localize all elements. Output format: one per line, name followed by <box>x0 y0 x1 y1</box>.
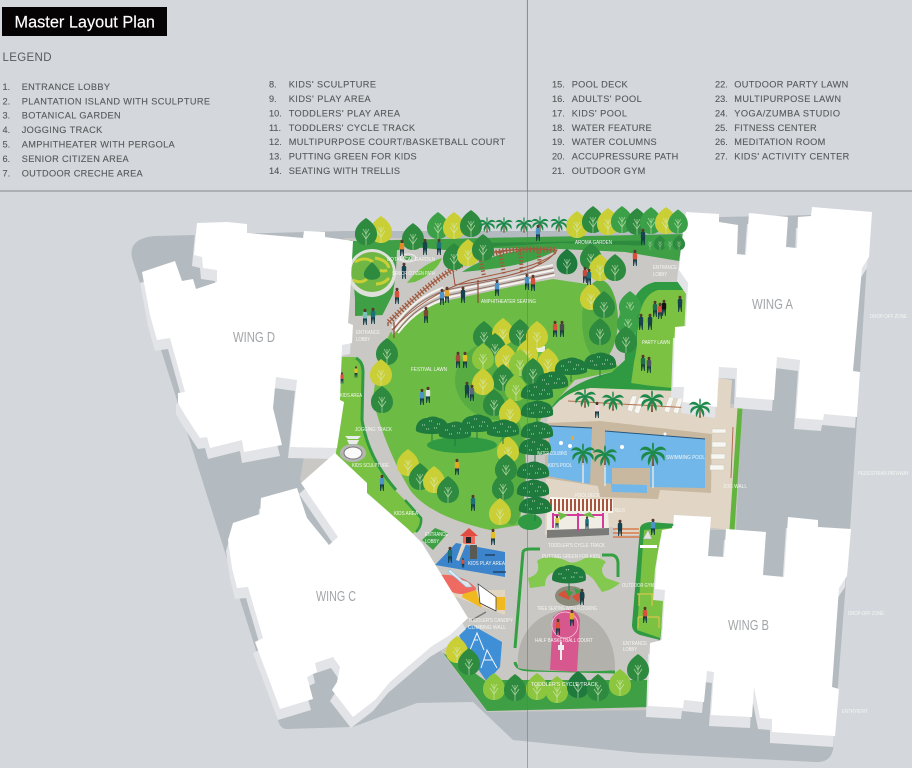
panel: map labels: FESTIVAL LAWN <box>411 367 447 373</box>
wing labels <box>233 297 793 634</box>
panel: map labels: KIDS AREA <box>394 511 418 517</box>
wing B footprint <box>648 515 851 736</box>
legend column 2: 14. <box>269 166 282 176</box>
panel: map labels: ENTRANCE <box>425 532 448 538</box>
panel: map labels: ENTRANCE <box>623 641 647 647</box>
legend column 1 <box>2 82 210 178</box>
legend column 2: MULTIPURPOSE COURT/BASKETBALL COURT <box>289 137 506 147</box>
legend column 3: ADULTS' POOL <box>572 94 642 104</box>
panel: toddlers swing area <box>458 612 502 682</box>
legend column 3: 15. <box>552 80 565 90</box>
legend column 3: 16. <box>552 94 565 104</box>
kids sculpture fountain <box>340 436 366 462</box>
panel: map labels: AMPHITHEATER SEATING <box>481 299 536 305</box>
legend column 3: ACCUPRESSURE PATH <box>572 152 678 162</box>
legend column 4: 27. <box>715 152 728 162</box>
legend column 4: OUTDOOR PARTY LAWN <box>734 80 848 90</box>
legend column 2: TODDLERS' PLAY AREA <box>289 108 401 118</box>
legend column 4: FITNESS CENTER <box>734 123 817 133</box>
legend column 1: PLANTATION ISLAND WITH SCULPTURE <box>22 96 210 106</box>
legend column 1: 1. <box>2 82 10 92</box>
legend column 4: 24. <box>715 108 728 118</box>
panel: palm trees <box>479 217 710 488</box>
panel: half basketball court <box>518 610 615 672</box>
legend column 2 <box>269 80 506 176</box>
panel: map labels: JOGGING TRACK <box>355 427 392 433</box>
legend column 3: 21. <box>552 166 565 176</box>
panel: map labels: WATER COLUMNS <box>537 451 567 457</box>
panel: map labels: TODDLER'S CANOPY <box>468 618 513 624</box>
panel: top garden band <box>350 234 685 320</box>
legend column 1: 5. <box>2 140 10 150</box>
legend column 2: 11. <box>269 123 281 133</box>
panel: map labels: HALF BASKETBALL COURT <box>535 638 594 644</box>
legend column 2: 9. <box>269 94 277 104</box>
legend column 1: AMPHITHEATER WITH PERGOLA <box>22 140 176 150</box>
panel: party lawn <box>548 282 690 412</box>
wing labels: WING D <box>233 330 275 346</box>
wing C footprint <box>228 453 468 717</box>
legend column 4: 23. <box>715 94 728 104</box>
pool swimmers <box>559 432 666 449</box>
panel: amphitheater seating <box>391 252 557 335</box>
site ground plate <box>131 215 870 762</box>
panel: pergola leaf <box>388 249 557 338</box>
panel: map labels: ENTRANCE <box>653 265 677 271</box>
panel: map labels: BOTANICAL GARDEN <box>387 257 435 263</box>
legend column 1: 6. <box>2 154 10 164</box>
building sides <box>140 218 870 747</box>
pergola with seating <box>547 497 639 538</box>
legend column 2: TODDLERS' CYCLE TRACK <box>289 123 416 133</box>
legend column 2: 10. <box>269 108 282 118</box>
legend column 3: OUTDOOR GYM <box>572 166 645 176</box>
legend column 4: 22. <box>715 80 728 90</box>
panel: festival lawn <box>373 279 620 530</box>
legend column 4: MEDITATION ROOM <box>734 137 825 147</box>
panel: map labels: SENIOR CITIZEN PATH <box>392 271 435 277</box>
wing labels: WING C <box>316 589 356 605</box>
panel: tree seating <box>552 565 586 606</box>
panel: plantation island garden <box>348 249 396 297</box>
legend column 3: 18. <box>552 123 565 133</box>
dark shrub mounds under trees <box>427 280 637 530</box>
wing D footprint <box>142 222 353 452</box>
panel: map labels: ENTRY/EXIT <box>842 709 869 715</box>
legend column 4: MULTIPURPOSE LAWN <box>734 94 841 104</box>
panel: map labels: LOBBY <box>653 272 667 278</box>
water-feature white planter <box>476 346 545 404</box>
panel: map labels: PUTTING GREEN FOR KIDS <box>542 554 600 560</box>
legend column 2: KIDS' PLAY AREA <box>289 94 372 104</box>
wing labels: WING A <box>752 297 793 313</box>
panel: map labels: LOBBY <box>425 539 439 545</box>
legend column 3: POOL DECK <box>572 80 629 90</box>
panel: map labels: ENTRANCE <box>356 330 380 336</box>
panel: map labels: TODDLER'S CYCLE TRACK <box>548 543 605 549</box>
panel: map labels: KID'S POOL <box>548 463 572 469</box>
panel: people figures <box>340 225 682 635</box>
play house <box>456 528 478 561</box>
panel: map labels: TRELLIS <box>613 508 625 514</box>
legend column 4 <box>715 80 850 162</box>
legend column 1: BOTANICAL GARDEN <box>22 111 121 121</box>
panel: map labels <box>340 240 909 715</box>
title <box>2 7 167 36</box>
legend column 2: PUTTING GREEN FOR KIDS <box>289 152 417 162</box>
panel: map labels: KIDS AREA <box>340 393 362 399</box>
legend column 2: 12. <box>269 137 282 147</box>
trellis rail <box>568 401 733 478</box>
panel: map labels: LOBBY <box>356 337 370 343</box>
title: Master Layout Plan <box>14 14 155 32</box>
panel: map labels: AROMA GARDEN <box>575 240 612 246</box>
panel: map labels: PARTY LAWN <box>642 340 670 346</box>
legend column 3 <box>552 80 678 176</box>
legend column 2: SEATING WITH TRELLIS <box>289 166 400 176</box>
legend column 4: 26. <box>715 137 728 147</box>
legend column 3: 17. <box>552 108 565 118</box>
panel: map labels: CLIMBING WALL <box>468 625 506 631</box>
legend column 1: OUTDOOR CRECHE AREA <box>22 168 144 178</box>
panel: map labels: SWIMMING POOL <box>666 455 705 461</box>
panel: map labels: TREE SEATING WITH FLOORING <box>537 606 597 612</box>
pool loungers <box>627 396 726 470</box>
legend column 3: 19. <box>552 137 565 147</box>
panel: putting green <box>528 557 620 592</box>
wing labels: WING B <box>728 618 769 634</box>
panel: map labels: DROP-OFF ZONE <box>870 314 907 320</box>
legend column 4: YOGA/ZUMBA STUDIO <box>734 108 840 118</box>
panel: toddlers cycle track edging <box>515 549 618 672</box>
panel: swimming pools <box>545 421 712 499</box>
panel: lower green hedge <box>443 653 650 711</box>
panel: kids area bed <box>335 357 422 535</box>
legend column 1: 3. <box>2 111 10 121</box>
panel: map labels: KIDS SCULPTURE <box>352 463 389 469</box>
panel: map labels: POOL DECK <box>575 493 600 499</box>
panel: map labels: DROP-OFF ZONE <box>848 611 884 617</box>
legend column 1: 4. <box>2 125 10 135</box>
central walkway base <box>300 238 742 712</box>
panel: kids play area <box>435 528 506 615</box>
panel: pool deck <box>545 378 738 535</box>
entrance lobby planter <box>422 528 448 550</box>
legend column 1: 7. <box>2 168 10 178</box>
legend column 3: WATER FEATURE <box>572 123 652 133</box>
legend column 4: KIDS' ACTIVITY CENTER <box>734 152 850 162</box>
legend column 3: WATER COLUMNS <box>572 137 657 147</box>
panel: map labels: JOG WALL <box>723 484 747 490</box>
panel: map labels: KIDS PLAY AREA <box>468 561 505 567</box>
panel: map labels: TODDLER'S CYCLE TRACK <box>531 682 599 688</box>
legend column 1: ENTRANCE LOBBY <box>22 82 110 92</box>
panel: map labels: LOBBY <box>623 647 637 653</box>
legend column 1: 2. <box>2 96 10 106</box>
legend column 3: 20. <box>552 152 565 162</box>
legend column 1: JOGGING TRACK <box>22 125 103 135</box>
legend column 4: 25. <box>715 123 728 133</box>
legend heading: LEGEND <box>2 52 52 64</box>
panel: wing buildings <box>140 207 872 747</box>
legend column 3: KIDS' POOL <box>572 108 627 118</box>
legend column 1: SENIOR CITIZEN AREA <box>22 154 130 164</box>
legend column 2: KIDS' SCULPTURE <box>289 80 376 90</box>
panel: outdoor gym <box>632 522 675 640</box>
wing A footprint <box>673 207 872 420</box>
panel: yellow and green trees <box>355 206 688 703</box>
jog wall green strip <box>732 408 740 530</box>
legend column 2: 13. <box>269 152 282 162</box>
legend column 2: 8. <box>269 80 277 90</box>
panel: flowering canopy trees <box>416 352 616 521</box>
panel: map labels: OUTDOOR GYM <box>622 583 654 589</box>
